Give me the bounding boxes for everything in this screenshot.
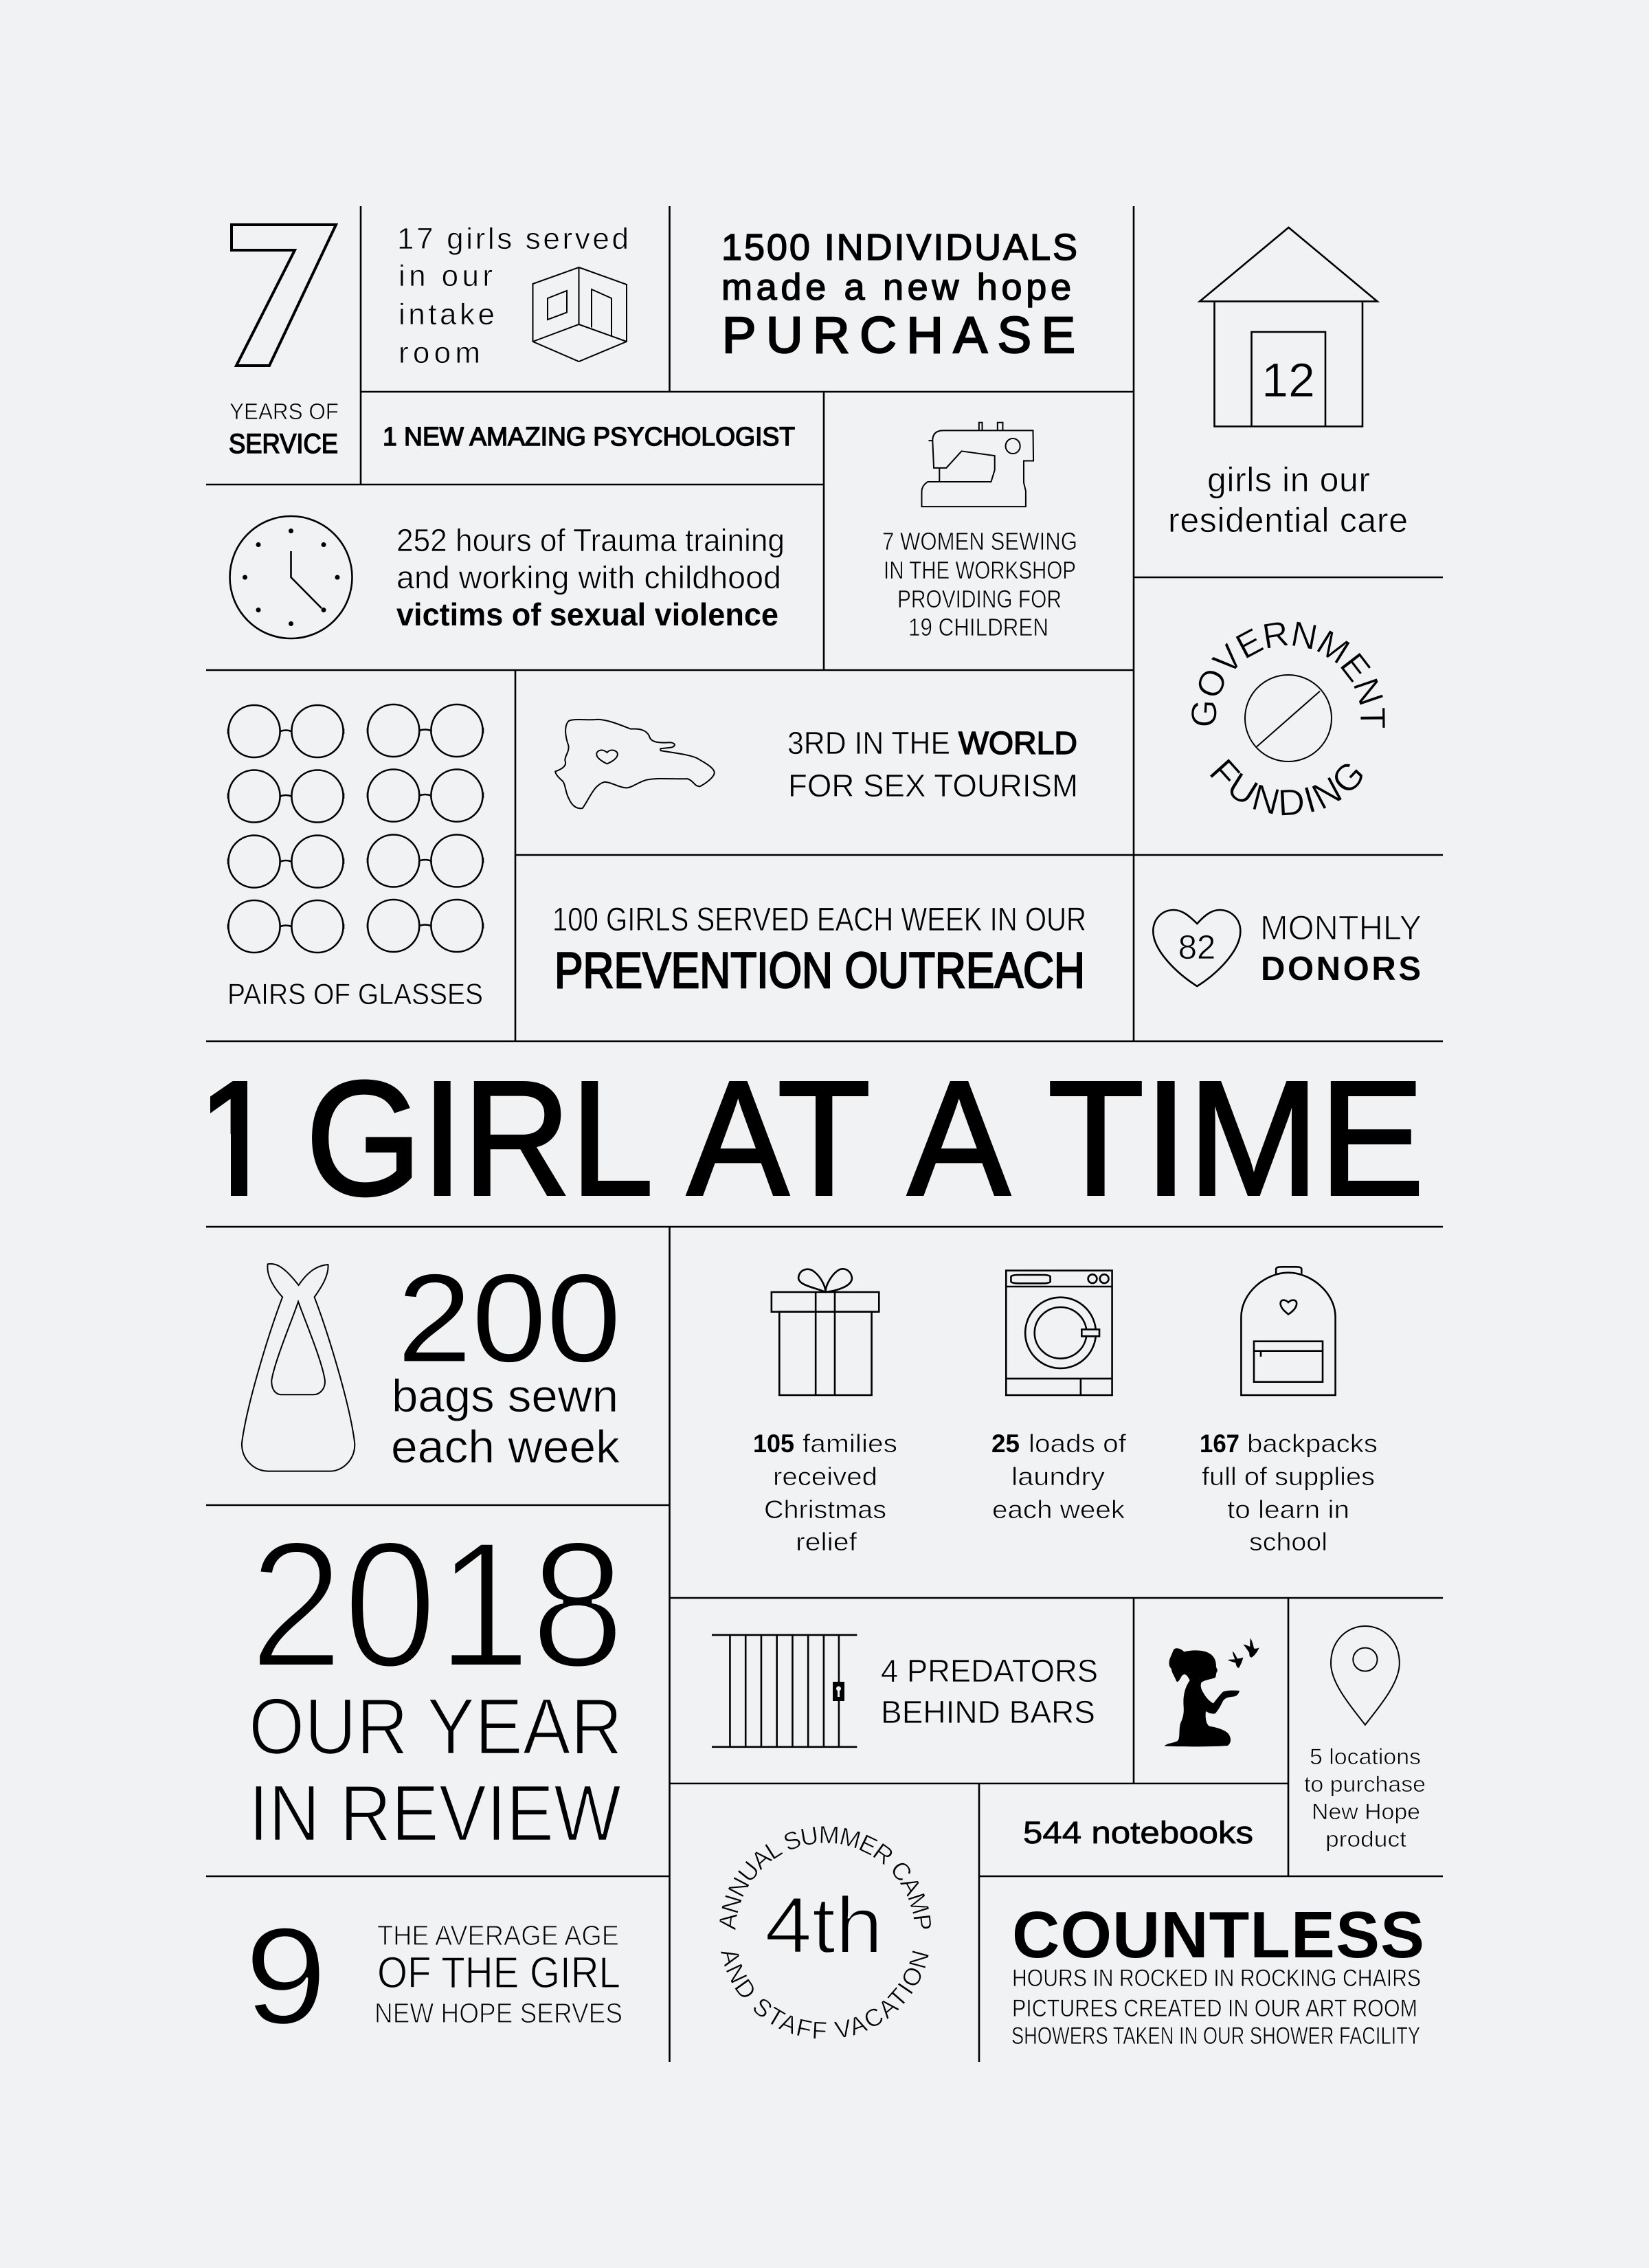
title: GIRL: [306, 1047, 653, 1230]
text: women sewing: 7 WOMEN SEWING: [882, 527, 1077, 555]
icon: house with 12: [1200, 227, 1378, 426]
text: trauma training hours: 252 hours of Trauma training: [396, 522, 785, 558]
icon: bag: [242, 1264, 355, 1471]
text: 3rd in the world: FOR SEX TOURISM: [788, 768, 1078, 803]
text: 4th: 4th: [765, 1880, 883, 1970]
panel: pairs of glasses: [227, 704, 483, 1011]
panel: 1500 individuals purchase: [721, 227, 1077, 364]
text: 4 predators behind bars: [881, 1653, 1098, 1730]
panel: 7 years of service: [229, 225, 339, 459]
text: women sewing: IN THE WORKSHOP: [884, 556, 1076, 584]
text: 105 families: relief: [796, 1528, 857, 1556]
title: TIME: [1048, 1047, 1424, 1230]
panel: monthly donors: [1153, 909, 1422, 988]
icon: outlined number 7: [232, 225, 336, 366]
text: 167 backpacks: [1200, 1430, 1378, 1556]
panel: predators behind bars: [712, 1635, 1098, 1747]
text: 4 predators behind bars: BEHIND BARS: [881, 1694, 1095, 1730]
text: 17 girls served in our intake room: room: [399, 336, 480, 370]
icon: jail bars with lock: [712, 1635, 857, 1747]
icon: heart with 82: [1153, 910, 1240, 986]
text: funding curved: FUNDING: [1210, 759, 1362, 815]
title: 1: [191, 1047, 282, 1230]
panel: laundry: [991, 1271, 1127, 1524]
icon: clock: [229, 516, 352, 638]
panel: prevention outreach: 100 GIRLS SERVED EACH WEEK IN OUR: [552, 902, 1086, 938]
text: 167 backpacks: backpacks: [1247, 1430, 1378, 1458]
text: 3rd in the world: WORLD: [958, 725, 1077, 761]
text: and staff vacation curved: AND STAFF VACATION: [721, 1950, 929, 2038]
icon: glasses grid: [228, 704, 483, 953]
panel: countless: HOURS IN ROCKED IN ROCKING CHAIRS: [1012, 1965, 1421, 1992]
text: five locations: product: [1325, 1827, 1406, 1852]
text: 17 girls served in our intake room: 17 girls served: [397, 222, 629, 256]
icon: girl silhouette with birds: [1165, 1638, 1259, 1746]
text: 200 bags sewn each week: bags sewn: [392, 1370, 618, 1422]
text: 17 girls served in our intake room: [397, 222, 629, 370]
text: five locations: [1304, 1744, 1426, 1852]
text: 167 backpacks: full of supplies: [1202, 1463, 1375, 1491]
panel: 2018 our year in review: OUR YEAR: [249, 1682, 622, 1771]
icon: gift: [772, 1269, 879, 1395]
panel: countless: COUNTLESS: [1012, 1898, 1424, 1972]
text: girls in our residential care: residential care: [1168, 501, 1408, 540]
text: 25 loads of laundry: loads of: [1029, 1430, 1127, 1458]
text: average age of the girl: OF THE GIRL: [377, 1948, 620, 1997]
panel: trauma training: [229, 516, 785, 638]
text: 25 loads of laundry: laundry: [1011, 1463, 1106, 1491]
text: 200 bags sewn each week: each week: [391, 1421, 620, 1473]
panel: countless: PICTURES CREATED IN OUR ART ROOM: [1012, 1995, 1417, 2022]
text: girls in our residential care: girls in our: [1207, 460, 1370, 499]
panel: five locations: [1304, 1626, 1426, 1852]
text: five locations: to purchase: [1304, 1772, 1426, 1797]
text: number 9: 9: [245, 1900, 327, 2053]
text: 167 backpacks: 167: [1200, 1430, 1239, 1458]
text: five locations: 5 locations: [1310, 1744, 1421, 1769]
panel: intake room: [397, 222, 629, 370]
text: average age of the girl: [374, 1920, 622, 2029]
icon: backpack: [1241, 1267, 1336, 1395]
title: [210, 1079, 1420, 1197]
panel: countless: SHOWERS TAKEN IN OUR SHOWER FACILITY: [1011, 2023, 1420, 2049]
text: trauma training hours: [396, 522, 785, 632]
text: 17 girls served in our intake room: in our: [399, 259, 493, 293]
text: average age of the girl: THE AVERAGE AGE: [377, 1920, 619, 1951]
text: years of service: YEARS OF: [229, 399, 339, 424]
text: women sewing: 19 CHILDREN: [908, 613, 1048, 641]
panel: backpacks: [1200, 1267, 1378, 1556]
text: 3rd in the world: 3RD IN THE: [787, 725, 950, 761]
text: monthly donors: [1260, 909, 1422, 988]
title: AT: [687, 1047, 871, 1230]
text: 200 bags sewn each week: [391, 1247, 621, 1473]
icon: house with 12: 12: [1261, 353, 1315, 407]
text: 200 bags sewn each week: 200: [397, 1247, 621, 1388]
panel: 2018 our year in review: [249, 1504, 625, 1858]
panel: average age 9: [245, 1900, 622, 2053]
icon: sewing machine: [921, 423, 1033, 507]
text: 105 families: received: [773, 1463, 877, 1491]
text: 167 backpacks: to learn in: [1227, 1496, 1349, 1524]
text: five locations: New Hope: [1312, 1799, 1420, 1824]
text: years of service: [229, 399, 339, 459]
text: 17 girls served in our intake room: intake: [399, 298, 495, 331]
text: monthly donors: MONTHLY: [1260, 909, 1422, 947]
panel: 2018 our year in review: IN REVIEW: [249, 1768, 621, 1858]
text: years of service: SERVICE: [229, 429, 338, 459]
icon: room: [533, 267, 627, 362]
icon: dominican republic map with heart: [555, 720, 715, 808]
text: monthly donors: DONORS: [1261, 950, 1421, 988]
text: annual summer camp curved: ANNUAL SUMMER CAMP: [719, 1827, 931, 1930]
text: trauma training hours: victims of sexual violence: [396, 597, 778, 632]
text: 105 families: 105: [753, 1430, 794, 1458]
text: 105 families: [753, 1430, 897, 1556]
text: 105 families: families: [803, 1430, 897, 1458]
panel: 1500 individuals purchase: 1500 INDIVIDUALS: [721, 227, 1077, 268]
text: government curved: GOVERNMENT: [1191, 621, 1385, 728]
icon: map pin: [1331, 1626, 1400, 1725]
text: 25 loads of laundry: each week: [992, 1496, 1125, 1524]
panel: women sewing: [882, 423, 1077, 641]
text: 1 new amazing psychologist: 1 NEW AMAZING PSYCHOLOGIST: [383, 423, 795, 452]
text: 167 backpacks: school: [1249, 1528, 1327, 1556]
panel: christmas relief: [753, 1269, 897, 1556]
text: pairs of glasses: PAIRS OF GLASSES: [227, 978, 483, 1011]
text: 4 predators behind bars: 4 PREDATORS: [881, 1653, 1098, 1689]
panel: summer camp badge: [719, 1827, 931, 2038]
panel: prevention outreach: PREVENTION OUTREACH: [554, 943, 1085, 999]
panel: countless: [1011, 1898, 1424, 2049]
title: A: [908, 1047, 1010, 1230]
icon: washing machine: [1006, 1271, 1112, 1395]
panel: 2018 our year in review: 2018: [249, 1504, 625, 1705]
text: girls in our residential care: [1168, 460, 1408, 540]
text: trauma training hours: and working with childhood: [396, 559, 781, 595]
panel: government funding: [1191, 621, 1385, 815]
panel: 1500 individuals purchase: PURCHASE: [722, 307, 1075, 364]
icon: heart with 82: 82: [1178, 929, 1215, 966]
panel: 1500 individuals purchase: made a new hope: [721, 267, 1071, 308]
text: 25 loads of laundry: 25: [991, 1430, 1020, 1458]
panel: prevention outreach: [552, 902, 1086, 999]
panel: residential care: [1168, 227, 1408, 540]
panel: sex tourism: [555, 720, 1078, 808]
text: women sewing: PROVIDING FOR: [897, 585, 1062, 613]
text: 544 notebooks: 544 notebooks: [1023, 1815, 1253, 1850]
text: average age of the girl: NEW HOPE SERVES: [374, 1997, 622, 2029]
text: 105 families: Christmas: [764, 1496, 886, 1524]
text: women sewing: [882, 527, 1077, 641]
text: 3rd in the world: [787, 725, 1078, 803]
panel: bags sewn: [242, 1247, 621, 1473]
text: 25 loads of laundry: [991, 1430, 1127, 1524]
icon: no symbol: [1245, 675, 1332, 761]
